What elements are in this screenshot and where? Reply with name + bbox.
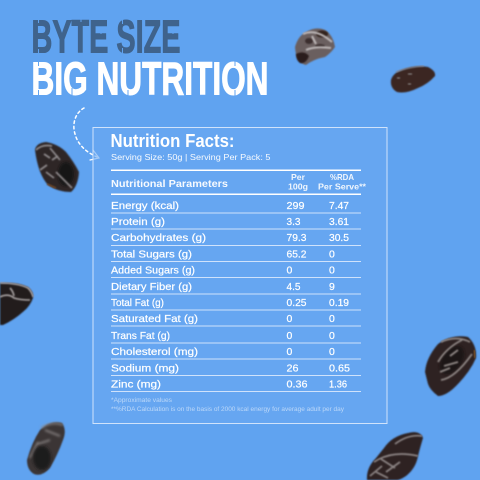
footnotes	[111, 397, 345, 413]
row: dietary fiber: Dietary Fiber (g)	[111, 281, 192, 293]
row: zinc: 1.36	[329, 378, 347, 390]
table rows	[111, 200, 350, 390]
raisin: left	[35, 142, 79, 192]
row: saturated fat: 0	[329, 313, 335, 325]
raisin: top	[295, 28, 335, 65]
row: saturated fat: 0	[286, 313, 292, 325]
row: energy: 299	[286, 200, 305, 212]
row: trans fat: 0	[329, 330, 335, 342]
footnotes: **%RDA Calculation is on the basis of 2000 kcal energy for average adult per day	[111, 406, 345, 413]
row: saturated fat	[111, 313, 335, 325]
row: saturated fat: Saturated Fat (g)	[111, 313, 198, 325]
row: protein: Protein (g)	[111, 216, 165, 228]
table header: Per Serve**	[318, 182, 367, 192]
row: cholesterol: 0	[286, 346, 292, 358]
row: zinc: Zinc (mg)	[111, 378, 161, 390]
row: energy: Energy (kcal)	[111, 200, 179, 212]
row: added sugars: 0	[329, 264, 335, 276]
row: trans fat: 0	[286, 330, 292, 342]
raisin: bottom right	[367, 432, 423, 480]
row: zinc	[111, 378, 347, 390]
row: sodium: Sodium (mg)	[111, 362, 179, 374]
row: energy: 7.47	[329, 200, 349, 212]
row: dietary fiber: 9	[329, 281, 335, 293]
raisin: bottom left	[27, 422, 65, 475]
table header: %RDA	[330, 172, 354, 182]
row: total fat: 0.19	[329, 297, 349, 309]
raisin: right	[425, 336, 476, 396]
table header	[111, 170, 367, 195]
serving size text: Serving Size: 50g | Serving Per Pack: 5	[111, 152, 271, 162]
row: protein: 3.3	[286, 216, 301, 228]
row: sodium: 26	[286, 362, 299, 374]
row: protein: 3.61	[329, 216, 349, 228]
table	[111, 170, 367, 392]
row: zinc: 0.36	[286, 378, 308, 390]
row: trans fat: Trans Fat (g)	[111, 330, 170, 342]
raisin: mid left	[0, 283, 33, 325]
row: added sugars: Added Sugars (g)	[111, 264, 195, 276]
panel: nutrition facts	[93, 128, 387, 424]
row: total fat: 0.25	[286, 297, 307, 309]
row: carbohydrates: Carbohydrates (g)	[111, 232, 206, 244]
row: total sugars: 65.2	[286, 248, 307, 260]
title	[32, 10, 268, 104]
heading: byte size: BYTE SIZE	[32, 10, 180, 62]
row: carbohydrates: 30.5	[329, 232, 349, 244]
table header: Nutritional Parameters	[111, 178, 228, 190]
table header: 100g	[288, 182, 308, 192]
row: sodium: 0.65	[329, 362, 350, 374]
row: cholesterol	[111, 346, 335, 358]
footnotes: *Approximate values	[111, 397, 172, 404]
heading: big nutrition	[32, 52, 268, 104]
row: trans fat	[111, 330, 335, 342]
row: sodium	[111, 362, 350, 374]
heading: byte size	[32, 10, 180, 62]
heading: big nutrition: BIG NUTRITION	[32, 52, 268, 104]
row: total sugars: Total Sugars (g)	[111, 248, 192, 260]
row: cholesterol: Cholesterol (mg)	[111, 346, 198, 358]
row: added sugars: 0	[286, 264, 292, 276]
raisin: top right	[391, 66, 435, 92]
heading: nutrition facts: Nutrition Facts:	[110, 131, 234, 151]
row: carbohydrates	[111, 232, 349, 244]
row: total fat: Total Fat (g)	[111, 297, 164, 309]
row: total sugars	[111, 248, 335, 260]
row: cholesterol: 0	[329, 346, 335, 358]
table header: Per	[291, 172, 306, 182]
row: total sugars: 0	[329, 248, 335, 260]
row: dietary fiber: 4.5	[286, 281, 301, 293]
row: energy	[111, 200, 349, 212]
arrow: dashed curve to panel	[74, 108, 99, 160]
row: carbohydrates: 79.3	[286, 232, 307, 244]
row: protein	[111, 216, 349, 228]
row: total fat	[111, 297, 349, 309]
row: added sugars	[111, 264, 335, 276]
row: dietary fiber	[111, 281, 335, 293]
